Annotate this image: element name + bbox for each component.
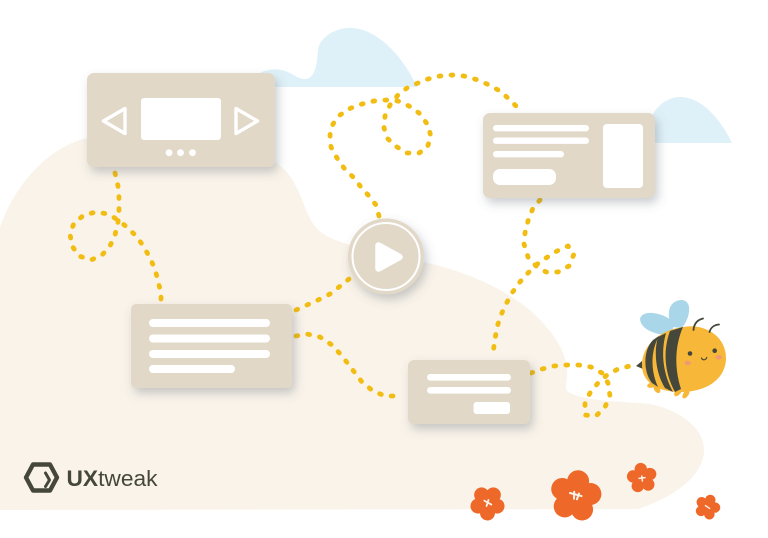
icon: flower 1 xyxy=(465,479,512,526)
panel: text card xyxy=(131,304,292,388)
text lines xyxy=(149,319,270,373)
dotted path: carousel to text card with loop xyxy=(70,173,161,303)
bee face xyxy=(684,348,722,365)
icon: right arrow xyxy=(236,108,258,134)
bee wings xyxy=(640,300,689,335)
logo: UXtweak xyxy=(26,464,158,491)
cloud: left xyxy=(258,28,417,87)
icon: play button xyxy=(348,218,424,294)
cloud: right xyxy=(645,97,732,143)
carousel pagination dots xyxy=(166,149,196,156)
icon: flower 3 xyxy=(625,461,659,493)
text lines xyxy=(427,374,511,394)
icon: left arrow xyxy=(104,108,125,134)
icon: bee xyxy=(636,300,726,400)
carousel image placeholder xyxy=(141,98,221,140)
dotted path: text card to small card xyxy=(296,334,403,396)
icon: flower 4 xyxy=(692,490,724,522)
image placeholder xyxy=(603,124,643,188)
dotted path: small card to bee with loop xyxy=(531,365,630,416)
dotted path: text card to play button xyxy=(296,279,349,310)
dotted path: play button to top-right card with loop xyxy=(330,75,518,216)
text lines xyxy=(493,125,589,157)
bee body xyxy=(642,326,726,392)
panel: carousel card xyxy=(87,73,275,167)
wordmark: UXtweak xyxy=(66,466,158,491)
icon: hexagon logo mark xyxy=(26,464,57,490)
icon: flower 2 xyxy=(547,466,605,523)
dotted path: top-right card to small card with loop xyxy=(493,200,574,353)
panel: top-right card xyxy=(483,113,655,198)
button xyxy=(493,169,556,185)
bee feet xyxy=(646,381,691,400)
bee antennae xyxy=(694,318,719,332)
bee stinger xyxy=(636,361,643,369)
background hill xyxy=(0,130,704,510)
panel: small card xyxy=(408,360,530,424)
button xyxy=(474,402,510,414)
bee stripes xyxy=(645,327,683,392)
